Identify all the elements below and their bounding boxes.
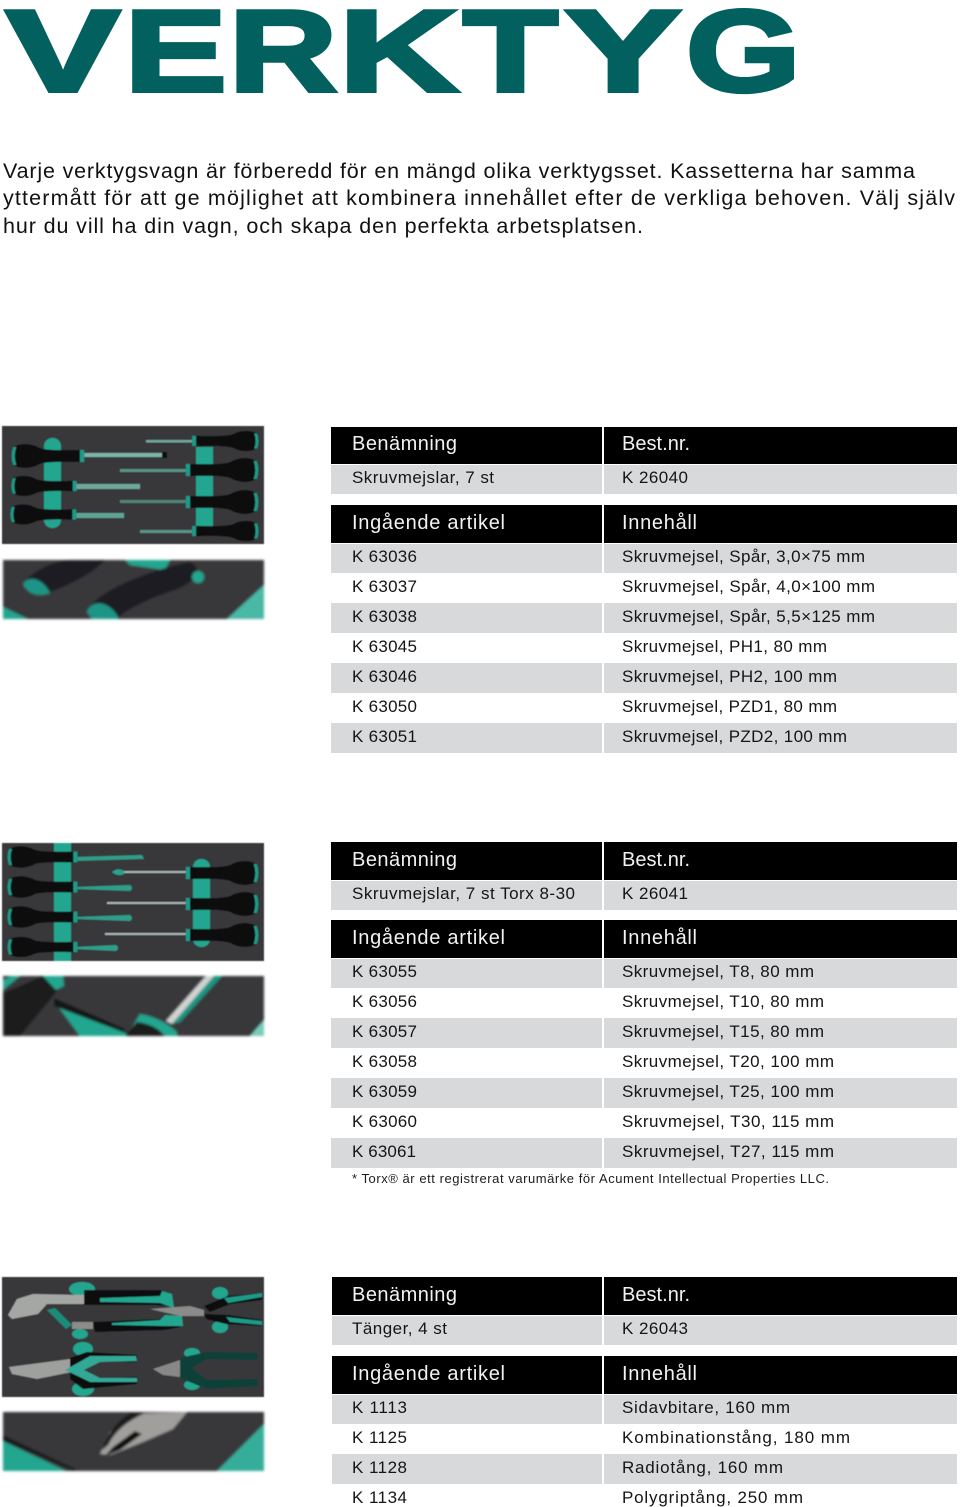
- photo: Torx handle close-up: [3, 976, 264, 1036]
- table: Skruvmejslar, 7 st Torx 8-30: Skruvmejsel, T8, 80 mm: [622, 962, 814, 981]
- table: Tänger, 4 st: Best.nr.: [622, 1284, 690, 1306]
- table: Skruvmejslar, 7 st Torx 8-30: Skruvmejsel, T27, 115 mm: [622, 1142, 834, 1161]
- table: Skruvmejslar, 7 st: Skruvmejsel, PH1, 80 mm: [622, 637, 827, 656]
- table: Skruvmejslar, 7 st: Skruvmejsel, PZD2, 100 mm: [622, 727, 847, 746]
- table: Skruvmejslar, 7 st: Skruvmejsel, PH2, 100 mm: [622, 667, 837, 686]
- table: Skruvmejslar, 7 st Torx 8-30: Skruvmejsel, T20, 100 mm: [622, 1052, 834, 1071]
- table: Skruvmejslar, 7 st: Ingående artikel: [352, 512, 505, 534]
- table: Tänger, 4 st: K 1134: [352, 1488, 407, 1507]
- photo: pliers tray: [2, 1277, 264, 1397]
- table: Skruvmejslar, 7 st Torx 8-30: K 63059: [352, 1082, 417, 1101]
- table: Skruvmejslar, 7 st: K 63036: [352, 547, 417, 566]
- table: Tänger, 4 st: Kombinationstång, 180 mm: [622, 1428, 850, 1447]
- table: Skruvmejslar, 7 st Torx 8-30: K 63056: [352, 992, 417, 1011]
- table: Skruvmejslar, 7 st Torx 8-30: Skruvmejsel, T30, 115 mm: [622, 1112, 834, 1131]
- table: Tänger, 4 st: Ingående artikel: [352, 1363, 505, 1385]
- table: Tänger, 4 st: K 1125: [352, 1428, 407, 1447]
- table: Tänger, 4 st: Innehåll: [622, 1363, 697, 1385]
- table: Tänger, 4 st: Polygriptång, 250 mm: [622, 1488, 803, 1507]
- table: Skruvmejslar, 7 st: [331, 427, 957, 753]
- table: Skruvmejslar, 7 st: Benämning: [352, 433, 457, 455]
- table: Skruvmejslar, 7 st: Skruvmejslar, 7 st: [352, 468, 494, 487]
- table: Skruvmejslar, 7 st Torx 8-30: Skruvmejsel, T15, 80 mm: [622, 1022, 824, 1041]
- table: Skruvmejslar, 7 st Torx 8-30: Skruvmejslar, 7 st Torx 8-30: [352, 884, 575, 903]
- table: Skruvmejslar, 7 st: K 63046: [352, 667, 417, 686]
- table: Tänger, 4 st: Tänger, 4 st: [352, 1319, 447, 1338]
- table: Skruvmejslar, 7 st Torx 8-30: K 63061: [352, 1142, 416, 1161]
- table: Skruvmejslar, 7 st: K 63038: [352, 607, 417, 626]
- title: [6, 0, 801, 116]
- table: Skruvmejslar, 7 st Torx 8-30: Skruvmejsel, T10, 80 mm: [622, 992, 824, 1011]
- intro text: [3, 159, 955, 238]
- table: Skruvmejslar, 7 st: K 63050: [352, 697, 417, 716]
- table: Skruvmejslar, 7 st Torx 8-30: Skruvmejsel, T25, 100 mm: [622, 1082, 834, 1101]
- table: Skruvmejslar, 7 st: Skruvmejsel, Spår, 4,0×100 mm: [622, 577, 875, 596]
- table: Tänger, 4 st: Radiotång, 160 mm: [622, 1458, 783, 1477]
- table: Tänger, 4 st: Sidavbitare, 160 mm: [622, 1398, 790, 1417]
- table: Tänger, 4 st: K 1128: [352, 1458, 407, 1477]
- intro text: yttermått för att ge möjlighet att kombinera innehållet efter de verkliga behoven. Välj själv: [3, 186, 955, 210]
- table: Skruvmejslar, 7 st: K 63051: [352, 727, 417, 746]
- table: Tänger, 4 st: K 1113: [352, 1398, 407, 1417]
- photo: screwdriver tray, slotted and Phillips: [2, 426, 264, 544]
- table: Skruvmejslar, 7 st: Skruvmejsel, Spår, 3,0×75 mm: [622, 547, 865, 566]
- intro text: hur du vill ha din vagn, och skapa den perfekta arbetsplatsen.: [3, 214, 643, 238]
- photo: pliers close-up: [3, 1412, 264, 1471]
- photo: Torx screwdriver tray: [2, 843, 264, 961]
- table: Skruvmejslar, 7 st: K 63045: [352, 637, 417, 656]
- photo: screwdriver handle close-up: [3, 560, 264, 619]
- table: Skruvmejslar, 7 st Torx 8-30: [331, 842, 957, 1168]
- table: Skruvmejslar, 7 st: K 63037: [352, 577, 417, 596]
- table: Skruvmejslar, 7 st: Skruvmejsel, PZD1, 80 mm: [622, 697, 837, 716]
- table: Tänger, 4 st: Benämning: [352, 1284, 457, 1306]
- table: Skruvmejslar, 7 st Torx 8-30: Best.nr.: [622, 849, 690, 871]
- table: Skruvmejslar, 7 st Torx 8-30: Innehåll: [622, 927, 697, 949]
- intro text: Varje verktygsvagn är förberedd för en mängd olika verktygsset. Kassetterna har samma: [3, 159, 915, 183]
- table: Skruvmejslar, 7 st Torx 8-30: K 63060: [352, 1112, 417, 1131]
- table: Skruvmejslar, 7 st Torx 8-30: Ingående artikel: [352, 927, 505, 949]
- footnote: * Torx® är ett registrerat varumärke för Acument Intellectual Properties LLC.: [352, 1171, 829, 1186]
- table: Skruvmejslar, 7 st: Innehåll: [622, 512, 697, 534]
- table: Skruvmejslar, 7 st: Skruvmejsel, Spår, 5,5×125 mm: [622, 607, 875, 626]
- table: Skruvmejslar, 7 st: K 26040: [622, 468, 688, 487]
- table: Tänger, 4 st: [332, 1277, 957, 1507]
- table: Skruvmejslar, 7 st: Best.nr.: [622, 433, 690, 455]
- table: Tänger, 4 st: K 26043: [622, 1319, 688, 1338]
- table: Skruvmejslar, 7 st Torx 8-30: K 63058: [352, 1052, 417, 1071]
- table: Skruvmejslar, 7 st Torx 8-30: K 63057: [352, 1022, 417, 1041]
- table: Skruvmejslar, 7 st Torx 8-30: K 63055: [352, 962, 417, 981]
- table: Skruvmejslar, 7 st Torx 8-30: Benämning: [352, 849, 457, 871]
- table: Skruvmejslar, 7 st Torx 8-30: K 26041: [622, 884, 688, 903]
